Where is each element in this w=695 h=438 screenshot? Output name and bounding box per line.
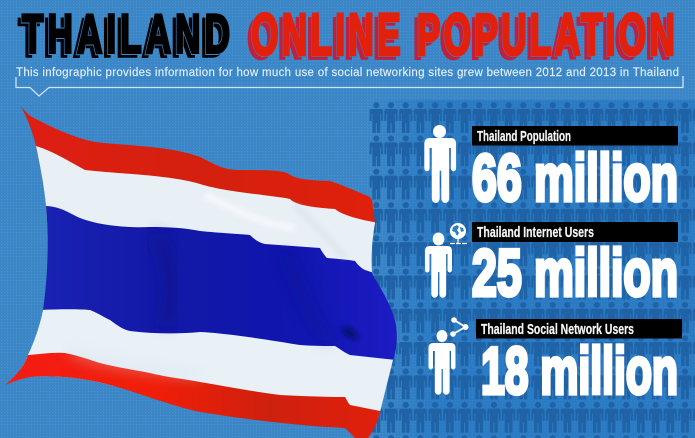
stat: Thailand social network users [428,317,682,408]
title word: Thailand: THAILAND [22,2,230,64]
label text: Thailand Population [477,128,571,145]
label bar [476,319,682,338]
title words: Online Population: ONLINE POPULATION [247,8,671,72]
title word: Thailand: THAILAND [22,2,230,64]
label text: Thailand Internet Users [477,224,594,241]
flag: centre blue stripe [40,206,400,365]
flag: bottom red stripe [0,353,385,438]
label bar [472,222,678,242]
person icon [425,232,452,298]
title words: Online Population: ONLINE POPULATION [251,4,675,68]
flag: upper white stripe [36,146,380,280]
stat: Thailand internet users [425,222,678,310]
label bar [472,126,678,146]
flag: top red stripe [20,105,375,230]
person icon [428,330,456,395]
title [18,2,675,72]
globe icon [450,223,467,244]
stat: Thailand population [424,125,678,214]
Thailand flag [0,100,400,438]
speech bubble bracket [16,76,683,96]
title words: Online Population: ONLINE POPULATION [251,4,675,68]
network icon [450,317,468,337]
subtitle: This infographic provides information for how much use of social networking sites grew between 2012 and 2013 in Thailand [16,67,679,79]
flag: soft fold shading [70,195,360,375]
person icon [424,125,456,203]
background people pattern [369,100,695,438]
flag: lower white stripe [20,309,396,420]
label text: Thailand Social Network Users [481,321,634,338]
title word: Thailand: THAILAND [18,6,226,68]
